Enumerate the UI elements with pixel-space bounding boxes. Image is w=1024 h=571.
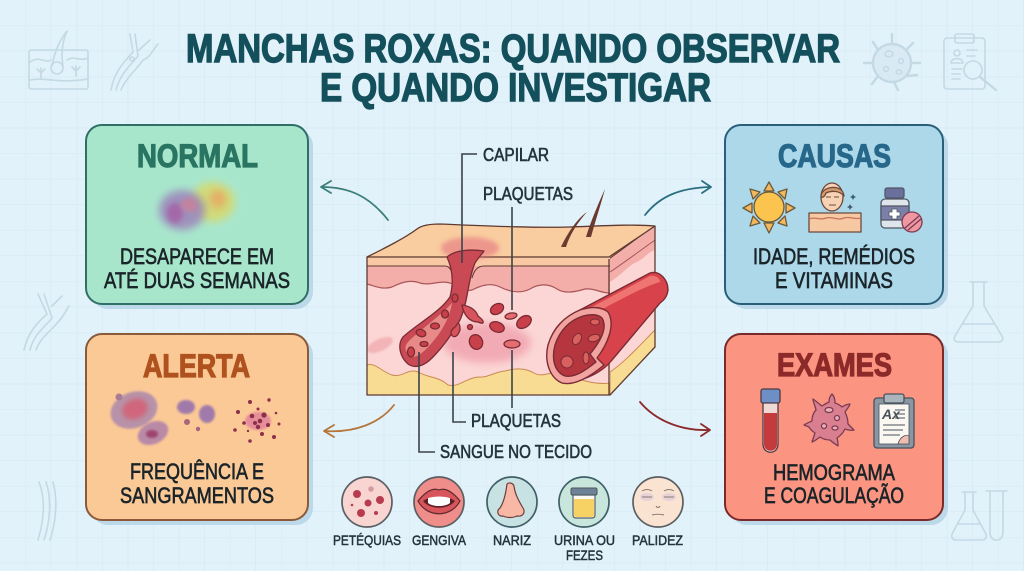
icon: aging face and skin xyxy=(809,183,861,232)
background icon: clipboard with magnifier xyxy=(944,34,996,90)
background icon: left lower vessel xyxy=(38,482,56,540)
title: E QUANDO INVESTIGAR xyxy=(320,66,711,110)
skin front layers xyxy=(365,257,610,395)
hairs xyxy=(561,189,605,247)
block outline xyxy=(367,226,655,395)
title xyxy=(186,27,840,110)
text: normal description: DESAPARECE EM xyxy=(120,244,274,269)
heading: causas: CAUSAS xyxy=(778,138,891,174)
skin top face xyxy=(367,224,655,259)
title: MANCHAS ROXAS: QUANDO OBSERVAR xyxy=(186,27,840,71)
background icon: flask xyxy=(954,282,1003,342)
icon: bruises xyxy=(105,385,215,450)
heading: exames: EXAMES xyxy=(777,347,892,383)
text: alerta description xyxy=(120,459,274,508)
background icon: left vessel xyxy=(24,294,69,350)
arrow: to alerta xyxy=(324,405,394,437)
icon: clipboard: Ax xyxy=(881,406,901,422)
leaking blood drops xyxy=(451,305,483,337)
symptom: nariz xyxy=(487,477,537,548)
bruise stain xyxy=(441,237,499,259)
text: causas description: IDADE, REMÉDIOS xyxy=(753,244,915,269)
symptom: petequias xyxy=(333,477,401,548)
label: urina ou fezes: FEZES xyxy=(566,547,603,563)
background icon: virus xyxy=(864,34,920,90)
label: gengiva: GENGIVA xyxy=(412,532,467,548)
red blood cells xyxy=(408,294,534,357)
icon: fading bruise xyxy=(159,182,235,230)
skin right face xyxy=(610,227,654,394)
symptom: urina ou fezes xyxy=(554,477,615,563)
text: exames description: HEMOGRAMA xyxy=(773,460,895,485)
label: palidez: PALIDEZ xyxy=(632,532,683,548)
icon: medicine bottle and pill xyxy=(881,188,922,232)
text: exames description: E COAGULAÇÃO xyxy=(764,483,904,508)
symptom: palidez xyxy=(632,477,683,548)
panel: alerta xyxy=(86,334,313,525)
arrow: to causas xyxy=(645,181,711,215)
heading: alerta: ALERTA xyxy=(143,348,250,384)
icon: petechiae cluster xyxy=(233,398,280,443)
label: sangue no tecido: SANGUE NO TECIDO xyxy=(440,442,592,462)
text: normal description xyxy=(104,244,290,293)
text: alerta description: SANGRAMENTOS xyxy=(120,483,274,508)
icon: sun xyxy=(743,182,795,233)
platelets xyxy=(504,312,520,348)
chart: skin cross-section xyxy=(365,189,668,400)
icon: blood tube xyxy=(761,389,780,452)
text: alerta description: FREQUÊNCIA E xyxy=(130,459,264,484)
heading: normal: NORMAL xyxy=(137,138,258,174)
text: causas description xyxy=(753,244,915,293)
icon: clipboard xyxy=(874,394,914,448)
large blood vessel xyxy=(547,272,668,384)
panel: normal xyxy=(86,125,313,309)
ruptured capillary xyxy=(400,250,484,366)
label: urina ou fezes xyxy=(554,532,615,563)
label: capilar: CAPILAR xyxy=(483,145,549,165)
text: causas description: E VITAMINAS xyxy=(775,268,893,293)
background icon: beakers xyxy=(952,491,1007,540)
background icon: skin section xyxy=(29,31,88,89)
label: plaquetas bottom: PLAQUETAS xyxy=(471,411,561,431)
label: nariz: NARIZ xyxy=(493,532,531,548)
panel: exames xyxy=(725,334,948,525)
panel: causas xyxy=(725,125,948,309)
background icon: vessel xyxy=(111,34,158,90)
leader lines xyxy=(419,154,512,452)
text: normal description: ATÉ DUAS SEMANAS xyxy=(104,268,290,293)
icon: blood cell xyxy=(804,394,854,446)
text: exames description xyxy=(764,460,904,508)
arrow: to exames xyxy=(640,402,710,436)
symptom: gengiva xyxy=(412,477,467,548)
arrow: to normal xyxy=(321,181,388,220)
label: plaquetas top: PLAQUETAS xyxy=(483,184,573,204)
label: petequias: PETÉQUIAS xyxy=(333,532,401,548)
label: urina ou fezes: URINA OU xyxy=(554,532,615,548)
